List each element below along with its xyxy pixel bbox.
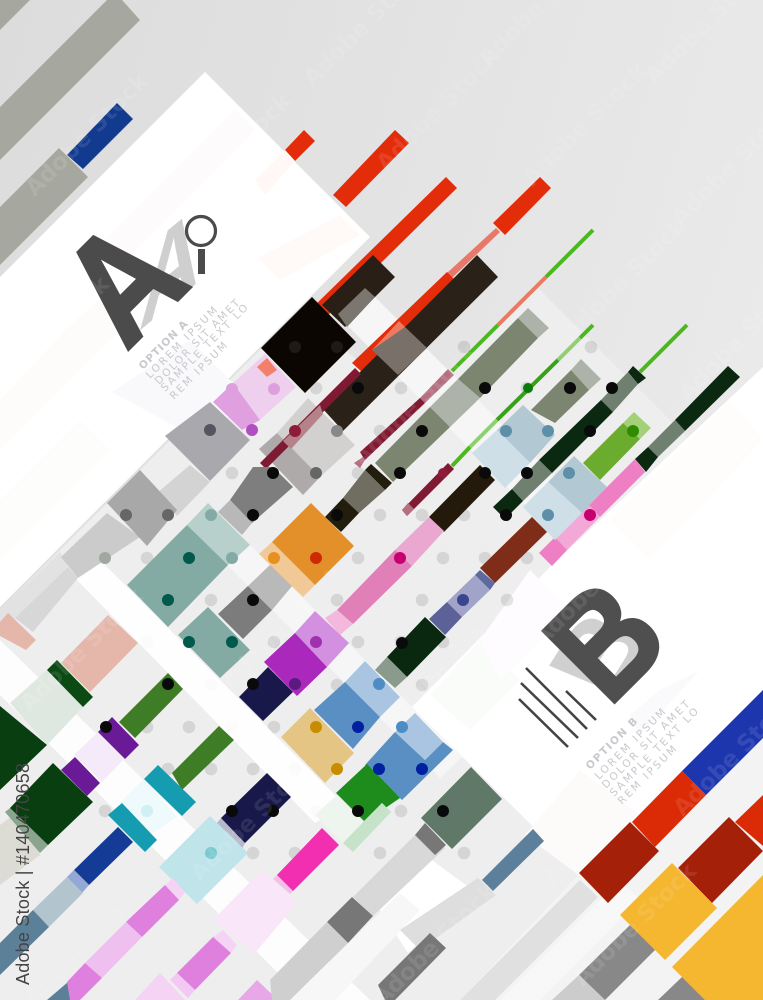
stock watermarks: Adobe Stock: [211, 218, 345, 352]
stock watermarks: Adobe Stock: [185, 753, 319, 887]
icon: four lines: [519, 668, 596, 747]
option B text: LOREM IPSUM: [593, 706, 668, 782]
stock watermarks: Adobe Stock: [538, 758, 672, 892]
dark green right stripe: [635, 366, 740, 472]
pale gray square: [259, 398, 355, 495]
magenta and pale pink: [213, 828, 339, 953]
gray-green square upper right: [531, 359, 601, 423]
stock watermarks: Adobe Stock: [48, 398, 182, 532]
gray squares upper left: [107, 467, 293, 639]
pink group with gray square: [165, 354, 296, 481]
blue squares: [314, 661, 453, 800]
left salmon and green group: [0, 613, 138, 790]
gray bars bottom centre: [270, 823, 598, 1000]
stock watermarks: Adobe Stock: [378, 598, 512, 732]
letter B heading with shadow: B: [524, 596, 675, 709]
teal and blue bars: [0, 765, 196, 1000]
brown-red and lavender bar: [375, 517, 547, 688]
stock watermarks: Adobe Stock: [216, 561, 350, 695]
letter A heading with shadow: A: [29, 188, 217, 375]
top-left gray and blue stripes: [0, 0, 140, 265]
option A text: REM IPSUM: [168, 340, 230, 402]
option B text: OPTION B: [584, 716, 640, 772]
option A text: LOREM IPSUM: [144, 305, 220, 381]
stock watermarks: Adobe Stock: [15, 583, 149, 717]
purple and navy group: [239, 611, 349, 721]
grid of gray dots: [99, 341, 597, 859]
option B text: [584, 698, 701, 807]
lime square: [583, 412, 651, 480]
tan square: [281, 708, 354, 783]
bottom-right colour stripes: [552, 690, 763, 1000]
orchid bars: [67, 878, 278, 1000]
stock watermarks: Adobe Stock: [163, 88, 297, 222]
brown and pink central bars: [325, 465, 495, 635]
letter A heading with shadow: A: [136, 174, 207, 358]
white crossing bands: [0, 297, 640, 1000]
navy and pale teal squares: [159, 773, 291, 904]
option A text: OPTION A: [137, 318, 191, 372]
panel B white: [412, 367, 763, 880]
gray-green long bar: [325, 308, 549, 532]
stock watermarks: Adobe Stock: [20, 68, 154, 202]
coloured dots: [99, 341, 639, 859]
red stripes above panel A: [285, 130, 409, 207]
orange square: [259, 503, 354, 597]
stock watermarks: Adobe Stock: [528, 518, 662, 652]
option B text: SAMPLE TEXT LO: [608, 706, 701, 799]
stock watermarks: Adobe Stock: [558, 213, 692, 347]
long red stripe under dark bars: [310, 177, 551, 372]
option B text: REM IPSUM: [616, 743, 679, 807]
lower-right light band: [460, 690, 763, 1000]
stock watermarks: Adobe Stock: [371, 43, 505, 177]
pale blue squares: [472, 405, 607, 540]
right pink bar: [539, 459, 645, 566]
teal squares: [127, 503, 250, 678]
stock watermarks: Adobe Stock: [348, 338, 482, 472]
stock watermarks: Adobe Stock: [518, 58, 652, 192]
black square: [261, 297, 356, 393]
icon: magnifier: [186, 216, 216, 274]
panel A white: [0, 72, 370, 607]
central light band: [0, 287, 763, 1000]
maroon stripes: [260, 368, 454, 516]
option A text: DOLOR SIT AMET: [153, 297, 243, 387]
letter B heading with shadow: B: [515, 550, 696, 731]
green square: [315, 764, 400, 852]
gray-green square and steel stripe: [421, 767, 544, 891]
stock id label: Adobe Stock | #140470658: [13, 763, 33, 985]
option A text: SAMPLE TEXT LO: [159, 302, 251, 394]
option B text: DOLOR SIT AMET: [600, 698, 693, 791]
dark bars: [322, 255, 498, 431]
stock watermarks: Adobe Stock: [568, 858, 702, 992]
green and purple group: [5, 673, 234, 853]
green lines: [452, 230, 687, 466]
dark green mid stripe: [493, 366, 646, 519]
